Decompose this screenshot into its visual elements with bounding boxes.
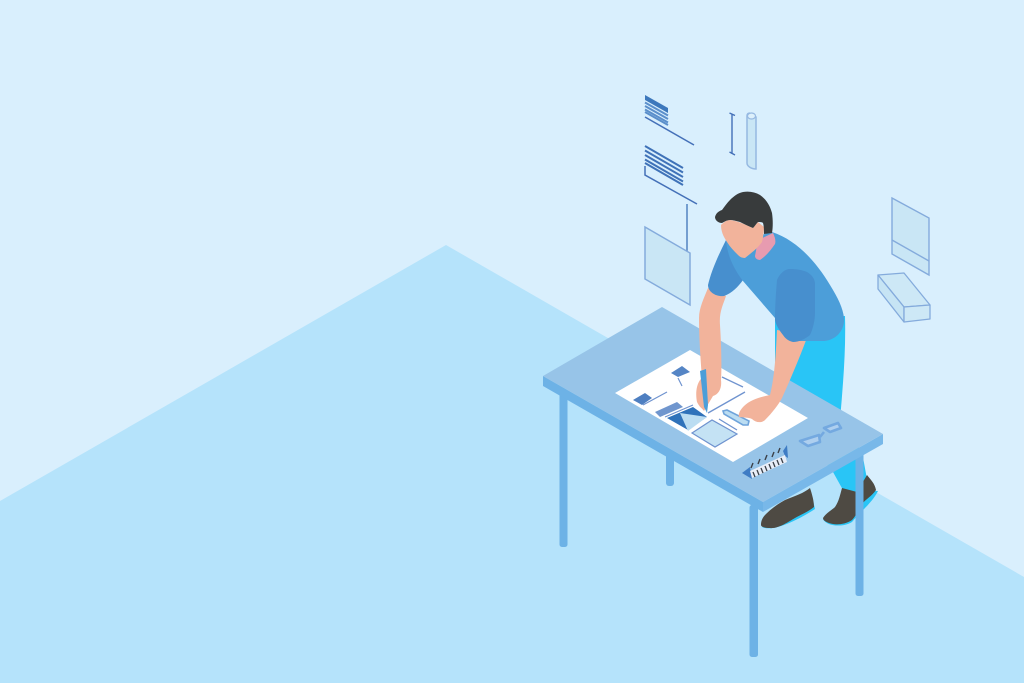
table top bbox=[543, 307, 883, 502]
dimension marker bbox=[730, 113, 735, 155]
floor bbox=[0, 245, 1024, 683]
glasses bbox=[800, 423, 841, 446]
table bbox=[543, 307, 883, 657]
right arm bbox=[739, 330, 808, 422]
neck collar bbox=[755, 233, 775, 260]
face bbox=[721, 220, 764, 258]
arrows bbox=[708, 377, 745, 430]
floating document: text lines top bbox=[645, 95, 694, 145]
floating box bbox=[878, 273, 930, 322]
table apron left bbox=[543, 376, 763, 512]
shirt body bbox=[726, 232, 844, 341]
mini stripes middle bbox=[655, 402, 683, 417]
paper drawings bbox=[633, 366, 749, 447]
floating connector line bbox=[686, 204, 688, 252]
floating document: text lines lower bbox=[645, 146, 697, 204]
hair bbox=[715, 192, 773, 234]
right shoe bbox=[823, 475, 878, 526]
left arm bbox=[696, 288, 726, 411]
light triangle shape bbox=[680, 413, 707, 431]
square on paper bbox=[692, 420, 737, 447]
ruler tool bbox=[742, 445, 788, 479]
paper sheet bbox=[615, 350, 808, 462]
table front legs bbox=[750, 505, 758, 657]
trousers bbox=[775, 316, 869, 494]
table apron right bbox=[763, 434, 883, 512]
person: torso and head bbox=[696, 192, 844, 422]
mini stripes left bbox=[633, 393, 652, 405]
ruler left end bbox=[742, 467, 752, 479]
shirt sleeve right bbox=[775, 269, 815, 342]
floating panel right bbox=[892, 198, 929, 275]
ruler right end bbox=[783, 445, 788, 458]
dark triangle shape bbox=[667, 407, 707, 430]
floating panel left bbox=[645, 227, 690, 305]
scale bar bbox=[723, 410, 749, 425]
shirt sleeve left bbox=[708, 240, 743, 296]
left shoe bbox=[761, 488, 815, 528]
person: legs and shoes bbox=[761, 316, 878, 528]
mini stripes top bbox=[671, 366, 690, 377]
table back legs bbox=[560, 390, 674, 547]
floating cylinder bbox=[747, 113, 756, 169]
pen bbox=[700, 369, 708, 413]
